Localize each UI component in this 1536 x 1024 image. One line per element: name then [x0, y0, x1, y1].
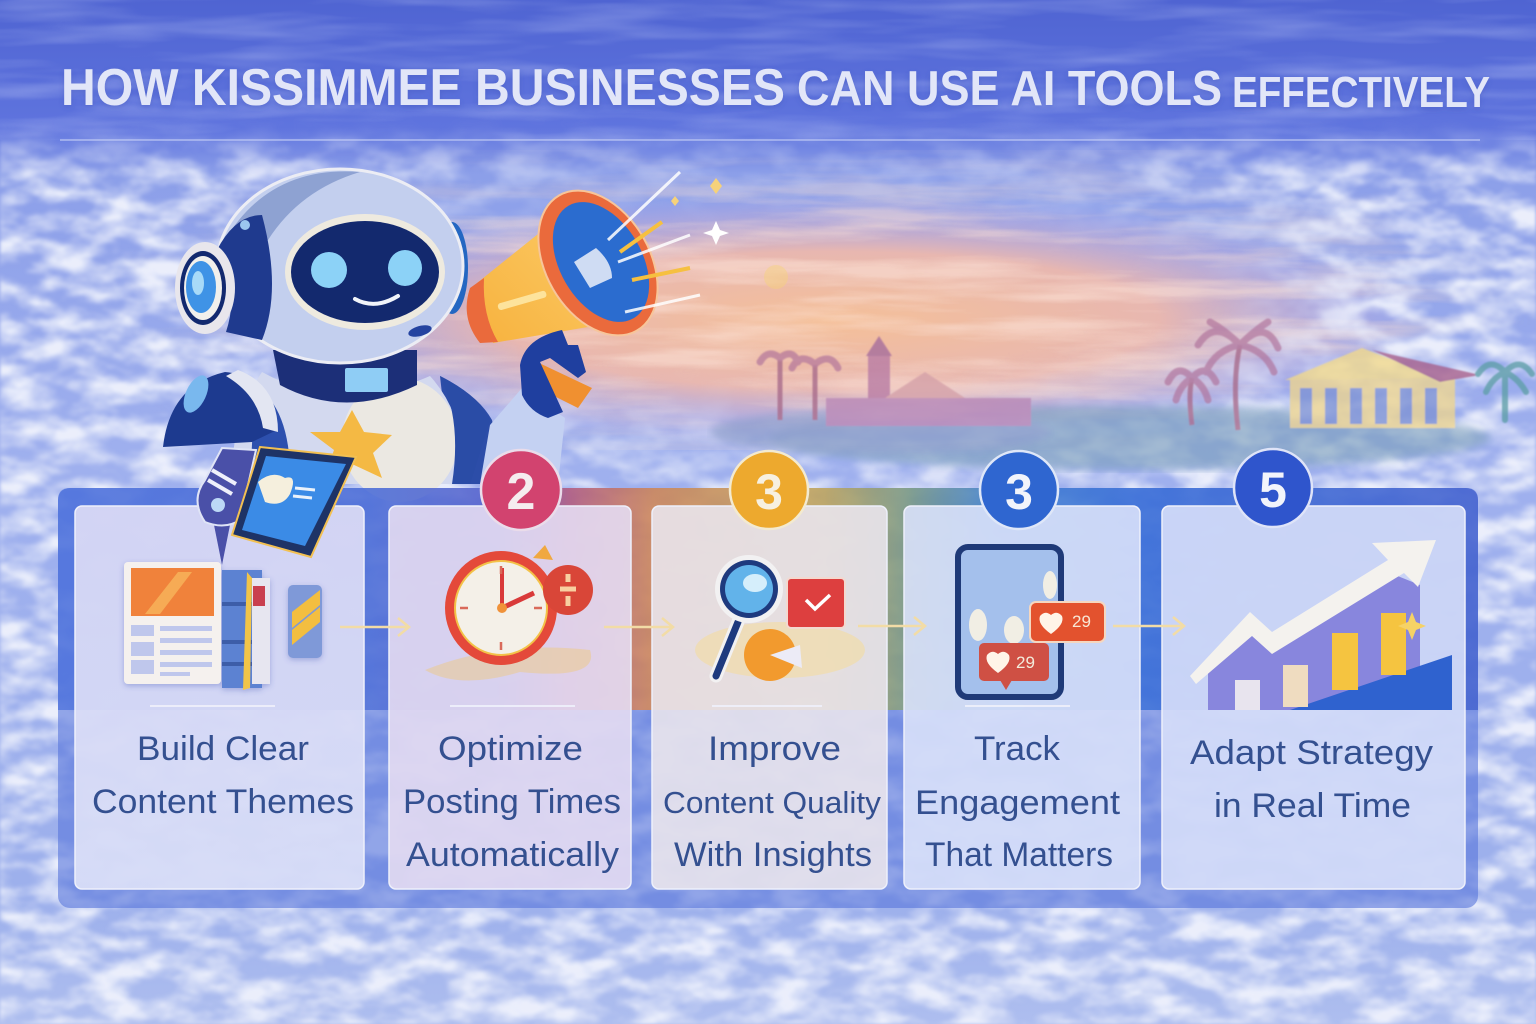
label: Engagement [915, 784, 1121, 822]
robot shoulder [163, 370, 278, 447]
step badge 2 [481, 450, 561, 530]
label: Automatically [406, 836, 619, 874]
label [92, 730, 354, 821]
title [61, 59, 1490, 117]
card 5 [1162, 506, 1465, 889]
landscape: Kissimmee skyline with palms and historic buildings [710, 322, 1532, 470]
step badge 2: 2 [507, 463, 535, 521]
robot neck [273, 350, 417, 402]
label: That Matters [925, 836, 1113, 874]
step badge 3: 3 [755, 464, 783, 520]
title: HOW KISSIMMEE BUSINESSES [61, 59, 785, 117]
label: Optimize [438, 730, 583, 768]
robot body [232, 372, 461, 484]
label: With Insights [674, 836, 872, 874]
step badge 5: 5 [1259, 462, 1287, 518]
card 4 [904, 506, 1140, 889]
step badge 3 [730, 451, 808, 529]
icon: content documents [124, 562, 322, 690]
label: Build Clear [137, 730, 309, 768]
label: Improve [708, 730, 841, 768]
card 2 [389, 506, 631, 889]
icon: magnifier with insights [695, 555, 865, 681]
icon: phone with engagement badges [958, 547, 1105, 697]
arrows between cards [340, 617, 1184, 636]
icon: phone with engagement badges: 29 [1016, 653, 1035, 672]
tablet [232, 447, 356, 557]
label [663, 730, 882, 874]
label: Content Themes [92, 783, 354, 821]
robot head [175, 169, 468, 363]
title: EFFECTIVELY [1232, 68, 1490, 117]
star emblem [310, 410, 392, 478]
decorative sparkles near the megaphone [671, 178, 788, 289]
robot arm [440, 376, 565, 484]
label: in Real Time [1214, 787, 1411, 825]
step badge 3 (fourth step): 3 [1005, 464, 1033, 520]
card 3 [652, 506, 887, 889]
card 1 [75, 506, 364, 889]
step badge 5 [1234, 449, 1312, 527]
tablet and pin held by the robot [198, 447, 356, 565]
label [403, 730, 621, 874]
megaphone [467, 169, 700, 357]
pin icon [198, 448, 256, 565]
label: Posting Times [403, 783, 621, 821]
label: Track [974, 730, 1061, 768]
step badge 3 (fourth step) [980, 451, 1058, 529]
chart: rising arrow and bars [1190, 540, 1452, 710]
icon: phone with engagement badges: 29 [1072, 612, 1091, 631]
label [915, 730, 1121, 874]
label [1190, 734, 1433, 825]
label: Content Quality [663, 785, 882, 820]
step frame [58, 488, 1478, 908]
robot mascot with megaphone [163, 169, 700, 502]
robot hand [520, 330, 592, 418]
label: Adapt Strategy [1190, 734, 1433, 772]
title: CAN USE AI TOOLS [797, 62, 1222, 116]
icon: clock [425, 545, 593, 681]
